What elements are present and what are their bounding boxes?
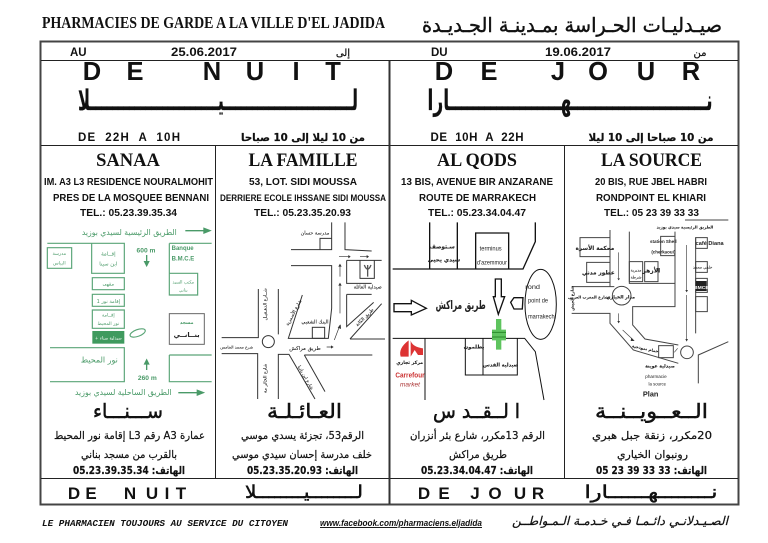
map: La Famille: طريق الكانة (355, 307, 376, 328)
map: Sanaa: بنــانــي (174, 331, 200, 339)
date row: right (431, 47, 706, 59)
heading: De jour: DEJOUR (435, 58, 700, 86)
pharmacy header: La Source (595, 151, 707, 219)
pharmacy header: Al Qods: ROUTE DE MARRAKECH (419, 192, 536, 204)
map: La Source: BMCE (694, 285, 709, 291)
date row: right: من (694, 48, 706, 59)
Arabic block: La Famille: الرقم53، تجزئة يسدي موسي (241, 430, 364, 442)
map: La Source: (cherkaoui) (651, 250, 676, 256)
map: Sanaa: الطريق الرئيسية لسيدي بوزيد (82, 228, 177, 237)
hours: day: DE 10H A 22H (430, 132, 524, 144)
Arabic block: La Famille: العـائـلـة (267, 399, 342, 423)
pharmacy header: Sanaa: PRES DE LA MOSQUEE BENNANI (53, 192, 209, 204)
map: Al Qods: سـتوصف (429, 244, 455, 250)
Arabic block: La Source (592, 399, 712, 477)
map: La Famille: شارع الخائر مة (263, 364, 269, 393)
footer row: night (68, 482, 363, 503)
pharmacy header: Sanaa: SANAA (96, 151, 161, 171)
map: La Source: صيدلية عوينة (645, 364, 675, 370)
map: La Source: خلفي محمد (693, 264, 713, 269)
map: Al Qods: Carrefour (395, 372, 425, 379)
date row: right: DU (431, 47, 448, 59)
pharmacy header: La Source: LA SOURCE (601, 151, 702, 171)
map: Sanaa: مكتب السيد (173, 279, 194, 285)
map: La Famille (220, 222, 385, 399)
map: Sanaa: الطريق الساحلية لسيدي بوزيد (75, 388, 172, 397)
map: La Source: مديرية (631, 268, 641, 273)
map: Sanaa (47, 228, 212, 397)
map: Sanaa: إقامة نور 1 (97, 299, 121, 305)
map: La Source: الطريق الرئيسية سيدي بوزيد (657, 224, 714, 229)
pharmacy header: La Source: 20 BIS, RUE JBEL HABRI (595, 176, 707, 188)
hours: day (430, 132, 714, 144)
hours: day: من 10 صباحا إلى 10 ليلا (588, 132, 714, 144)
date row: left: AU (70, 47, 87, 59)
map: La Source: Plan (643, 390, 659, 399)
map: Sanaa: البياس (53, 260, 66, 266)
map: Sanaa: Banque (172, 246, 194, 252)
map: Al Qods: صيدلية القدس (483, 363, 518, 369)
footer row: night: لــــــــيــــــــلا (245, 482, 363, 503)
Arabic block: Al Qods: ا لــقــد س (433, 399, 520, 423)
footer slogan: French: LE PHARMACIEN TOUJOURS AU SERVICE DU CITOYEN (42, 518, 288, 529)
Arabic block: La Famille (232, 399, 372, 477)
Arabic block: Sanaa: الهاتف: 05.23.39.35.34 (73, 465, 185, 477)
Arabic block: La Source: الهاتف: 33 33 39 23 05 (596, 465, 707, 477)
map: La Source: la source (649, 382, 667, 387)
map: Sanaa: إقــامة (102, 313, 115, 319)
map: La Source: عطور مدني (582, 270, 615, 276)
map: Sanaa: إقــامة (101, 252, 116, 258)
Arabic block: La Source: رونبوان الخياري (617, 449, 688, 461)
map: Al Qods: point de (528, 297, 548, 304)
heading: De nuit: DENUIT (83, 58, 341, 86)
map: La Famille: شرع محمد الخامس (220, 344, 253, 349)
footer row: night: DENUIT (68, 484, 187, 503)
icon: Carrefour logo (400, 340, 423, 357)
map: Sanaa: ابن سينا (99, 262, 117, 268)
map: Al Qods: rond (525, 284, 541, 291)
pharmacy header: Sanaa (44, 151, 214, 219)
pharmacy header: Al Qods: TEL.: 05.23.34.04.47 (428, 207, 526, 219)
Arabic block: La Famille: خلف مدرسة إحسان سيدي موسي (232, 449, 372, 461)
heading: Arabic night: لـــــــــــــــــــــــيـــــــــــــــــــــــلا (78, 84, 358, 117)
Arabic block: Al Qods: الهاتف: 05.23.34.04.47 (421, 465, 533, 477)
Arabic block: Al Qods (410, 399, 545, 477)
Arabic block: Sanaa: عمارة A3 رقم L3 إقامة نور المحيط (54, 430, 205, 442)
Arabic block: La Source: الــعــويــنــة (595, 399, 708, 423)
map: Al Qods: طريق مراكش (436, 298, 486, 312)
map: Sanaa: B.M.C.E (172, 257, 194, 263)
map: Sanaa: مسجد (180, 321, 194, 326)
map: La Famille: البنك الشعبي (301, 319, 329, 325)
map: La Source: شارع الجيش (569, 286, 574, 311)
Arabic block: Sanaa: بالقرب من مسجد بناني (81, 449, 177, 461)
map: Sanaa: مقهى (102, 282, 114, 288)
pharmacy header: La Source: TEL.: 05 23 39 33 33 (604, 207, 699, 219)
hours: night: من 10 ليلا إلى 10 صباحا (241, 132, 365, 144)
Arabic block: Al Qods: طريق مراكش (449, 449, 507, 461)
map: La Source: محكمة الأسرة (576, 244, 615, 252)
map: La Source: شرطة (631, 274, 641, 279)
pharmacy header: Al Qods: AL QODS (437, 151, 517, 171)
title: French: PHARMACIES DE GARDE A LA VILLE D'EL JADIDA (42, 13, 385, 32)
pharmacy header: Sanaa: TEL.: 05.23.39.35.34 (80, 207, 177, 219)
frame and grid (40, 42, 738, 504)
pharmacy header: La Famille: DERRIERE ECOLE IHSSANE SIDI MOUSSA (220, 193, 386, 204)
footer row: day (418, 482, 718, 503)
date row: left (70, 47, 350, 59)
map: La Famille: شارع الأسمرية (284, 298, 304, 327)
pharmacy header: Sanaa: IM. A3 L3 RESIDENCE NOURALMOHIT (44, 176, 214, 188)
Arabic block: Al Qods: الرقم 13مكرر، شارع بئر أنزران (410, 428, 545, 442)
hours: night (78, 132, 365, 144)
pharmacy header: La Famille (220, 151, 386, 219)
map: Sanaa: 260 m (138, 375, 157, 382)
hours: night: DE 22H A 10H (78, 132, 180, 144)
map: Al Qods (393, 222, 556, 400)
pharmacy header: La Famille: LA FAMILLE (248, 151, 358, 171)
Arabic block: Sanaa: ســـنـــاء (93, 399, 163, 423)
footer row: day: DEJOUR (418, 484, 544, 503)
map: Sanaa: بناني (179, 289, 188, 294)
map: Al Qods: بطلمون (464, 344, 484, 350)
map: Sanaa: صيدلية سناء + (95, 336, 122, 342)
footer link: www.facebook.com/pharmaciens.eljadida (320, 518, 482, 529)
Arabic block: La Famille: الهاتف: 05.23.35.20.93 (247, 465, 358, 477)
title: Arabic: صيـدليـات الحـراسة بمـدينـة الجـديـدة (422, 13, 722, 37)
map: La Source: مدار الخياري (606, 294, 635, 300)
pharmacy header: La Famille: TEL.: 05.23.35.20.93 (254, 207, 351, 219)
date row: left: إلى (336, 48, 350, 59)
map: La Source: pharmacie (645, 374, 667, 379)
map: Al Qods: سيدي يحيى (428, 258, 461, 264)
map: Al Qods: marrakech (528, 313, 555, 320)
date row: left: 25.06.2017 (171, 47, 237, 59)
map: La Source: station Shell (650, 239, 677, 245)
map: La Source: شارع المغرب العربي (568, 294, 609, 299)
map: Al Qods: d'azemmour (477, 259, 507, 266)
map: Sanaa: نور المحيط (81, 355, 118, 364)
map: Sanaa: مدرسة (53, 252, 67, 257)
map: La Source: حمام نموذجية (632, 343, 659, 354)
pharmacy header: Al Qods: 13 BIS, AVENUE BIR ANZARANE (401, 176, 553, 188)
Arabic block: Sanaa (54, 399, 205, 477)
Arabic block: La Source: 20مكرر، زنقة جبل هبري (592, 430, 712, 442)
map: La Famille: شــارع الدهـفيـل (263, 288, 269, 320)
map: Sanaa: نور المحيط (97, 321, 119, 327)
pharmacy header: La Source: RONDPOINT EL KHIARI (596, 192, 706, 204)
footer row: day: نــــــــهــــــارا (584, 482, 718, 503)
map: La Famille: مدرسة حسان (301, 230, 330, 236)
pharmacy header: La Famille: 53, LOT. SIDI MOUSSA (249, 176, 357, 188)
pharmacy header: Al Qods (401, 151, 553, 219)
map: La Famille: طريق مراكش (289, 345, 321, 352)
map: Al Qods: terminus (480, 246, 502, 253)
map: Sanaa: 600 m (137, 247, 156, 254)
map: La Source: الأزهر (641, 266, 660, 274)
map: La Famille: صيدلية العائلة (354, 285, 382, 291)
map: La Source (568, 220, 728, 399)
footer slogan: Arabic: الصـيـدلانـي دائـمـا فـي خـدمـة الـمـواطــن (512, 514, 730, 528)
map: La Source: café Diana (696, 241, 724, 247)
date row: right: 19.06.2017 (545, 47, 611, 59)
map: La Famille: شارع ابن باديا (296, 365, 315, 391)
map: Al Qods: market (400, 383, 420, 389)
map: Al Qods: مركز تجاري (396, 360, 423, 366)
